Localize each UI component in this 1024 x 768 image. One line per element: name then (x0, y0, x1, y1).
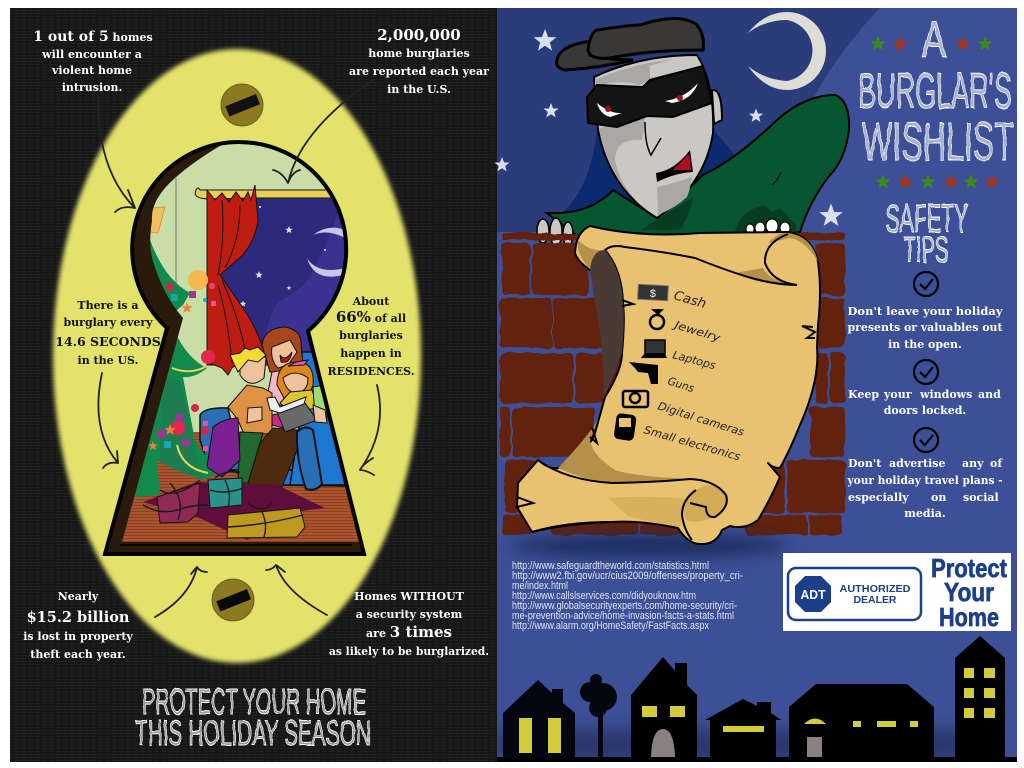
keyhole dark frame (100, 140, 370, 560)
tip 3: social (963, 491, 999, 504)
right fingers (746, 219, 790, 234)
stat: 66 percent (327, 295, 415, 378)
scroll lines (517, 234, 815, 540)
tip 3: media. (904, 507, 946, 520)
stat: 2,000,000 burglaries (349, 26, 489, 96)
stat: 3 times: as likely to be burglarized. (329, 645, 489, 658)
heading: safety tips (886, 197, 968, 270)
stat: 2,000,000 burglaries: 2,000,000 (377, 26, 461, 44)
boy (207, 347, 272, 483)
keyhole family scene (100, 140, 370, 560)
wishlist: jewelry (650, 309, 722, 345)
mask (587, 66, 712, 127)
grey smudge (590, 250, 624, 400)
tip 1: Don't leave your holiday (848, 305, 1003, 318)
stat: 3 times: are 3 times (366, 623, 452, 641)
stat: 14.6 seconds: in the US. (78, 354, 138, 367)
tip 1 (848, 305, 1003, 351)
tip 3: on (931, 491, 946, 504)
stat: 15.2 billion (23, 590, 133, 661)
authorized dealer: AUTHORIZED (840, 584, 910, 595)
tree (580, 674, 617, 758)
wishlist: cash: $ (650, 288, 656, 300)
authorized dealer (840, 584, 910, 606)
window night sky (207, 197, 357, 365)
stat: 3 times (329, 590, 489, 658)
tip 2: doors locked. (884, 404, 966, 417)
tip 2: Keep (848, 388, 879, 401)
stat: 66 percent: 66% of all (336, 308, 406, 326)
parchment scroll (517, 226, 820, 544)
gift: gold (227, 503, 305, 538)
hat (557, 18, 703, 70)
icon: sky stars (494, 29, 843, 226)
stat: 66 percent: happen in (340, 347, 402, 360)
scroll shading (558, 233, 818, 483)
mother (262, 327, 303, 410)
shoes (242, 484, 273, 495)
stat: 15.2 billion: is lost in property (23, 630, 133, 643)
tip 3: of (990, 457, 1003, 470)
heading: a burglar's wishlist: A (922, 11, 946, 68)
head shadow (560, 128, 735, 215)
red curtain (207, 185, 265, 375)
source links: me-prevention-advice/home-invasion-facts-a-stats.html (512, 610, 734, 622)
ADT protect your home ad (783, 553, 1011, 632)
tip 3: advertise (889, 457, 945, 470)
stat: violent intrusion: intrusion. (62, 81, 122, 94)
stat: 15.2 billion: theft each year. (30, 648, 126, 661)
tip 3: especially (848, 491, 909, 504)
protect your home label: Protect (931, 553, 1007, 583)
stat: 14.6 seconds: burglary every (63, 316, 153, 329)
wishlist: digital cameras: Digital cameras (656, 399, 746, 439)
protect your home label: Your (944, 577, 994, 607)
icon: check 3 (914, 428, 938, 452)
stat: violent intrusion: violent home (51, 64, 132, 77)
stat: 2,000,000 burglaries: home burglaries (368, 47, 470, 60)
floor (122, 432, 359, 542)
right eye (665, 83, 698, 103)
stat: 15.2 billion: Nearly (58, 590, 99, 603)
arrow: security system (266, 565, 327, 615)
stat: 3 times: a security system (356, 608, 463, 621)
panel: burglar's wishlist (494, 8, 1017, 762)
heading: safety tips: TIPS (904, 229, 948, 270)
arrow: burglaries (273, 80, 373, 183)
icon: ADT octagon: ADT (800, 587, 826, 602)
icon: ADT octagon (795, 576, 831, 612)
authorized dealer: DEALER (854, 595, 897, 606)
source links: http://www.alarm.org/HomeSafety/FastFacts.aspx (512, 620, 709, 632)
stat: 14.6 seconds: There is a (77, 299, 139, 312)
panel: keyhole door (10, 8, 497, 762)
heading: a burglar's wishlist (858, 11, 1014, 172)
icon: holiday stars top (870, 36, 993, 50)
burglar figure (537, 18, 849, 246)
heading: protect your home: PROTECT YOUR HOME (142, 681, 366, 722)
protect your home label: Home (939, 602, 999, 632)
stat: 2,000,000 burglaries: in the U.S. (387, 83, 451, 96)
wishlist: guns (629, 362, 696, 395)
tip 2: your (883, 388, 912, 401)
keyhole outline (105, 142, 364, 554)
icon: check 1 (914, 272, 938, 296)
stat: 14.6 seconds: 14.6 SECONDS (55, 334, 161, 349)
tip 1: presents or valuables out (848, 321, 1003, 334)
tip 2: windows (919, 388, 972, 401)
stat: 2,000,000 burglaries: are reported each year (349, 65, 489, 78)
wishlist: small electronics: Small electronics (642, 423, 742, 464)
arrow: residences (360, 385, 380, 475)
source links: http://www2.fbi.gov/ucr/cius2009/offenses/property_cri- (512, 570, 743, 582)
wishlist: laptops (641, 340, 717, 372)
icon: check 2 (914, 360, 938, 384)
wishlist: small electronics (613, 413, 742, 464)
tip 1: in the open. (888, 338, 962, 351)
curtain pelmet (195, 188, 350, 199)
stat: violent intrusion (33, 29, 153, 94)
stat: 3 times: Homes WITHOUT (354, 590, 465, 603)
source links: http://www.globalsecurityexperts.com/home-security/cri- (512, 600, 737, 612)
source links: http://www.safeguardtheworld.com/statistics.html (512, 560, 709, 572)
tip 3: any (962, 457, 984, 470)
wishlist: cash (638, 284, 708, 312)
green body (547, 95, 849, 236)
protect your home label (931, 553, 1007, 632)
stat: violent intrusion: will encounter a (41, 48, 142, 61)
arrow: intrusion (98, 95, 135, 212)
wishlist: jewelry: Jewelry (671, 318, 722, 345)
rug (143, 482, 325, 540)
skyline shadow (497, 730, 967, 760)
wishlist: laptops: Laptops (671, 348, 717, 372)
neighbourhood skyline (497, 636, 1017, 762)
tip 3 (847, 457, 1003, 520)
nose (645, 122, 661, 155)
lower roll (684, 485, 727, 522)
left eye (597, 103, 622, 117)
icon: bottom screw (212, 579, 254, 621)
stat: 66 percent: burglaries (339, 329, 403, 342)
wishlist: digital cameras (623, 391, 746, 439)
christmas tree (135, 206, 216, 497)
house 4 (789, 684, 934, 758)
left fingers (537, 218, 573, 246)
icon: holiday stars bottom (875, 174, 1000, 188)
stat: 66 percent: About (352, 295, 390, 308)
girl with book (267, 360, 327, 432)
arrow: every 14.6 seconds (98, 373, 118, 468)
tip 2 (848, 388, 1001, 417)
legs (248, 428, 297, 492)
stat: 15.2 billion: $15.2 billion (27, 609, 130, 626)
mouth (656, 150, 693, 182)
tip 3: your holiday travel plans - (847, 474, 1002, 487)
source links (512, 560, 743, 632)
ear (712, 90, 722, 124)
tip 3: Don't (848, 457, 882, 470)
brick wall (500, 233, 845, 535)
icon: top screw (221, 84, 263, 126)
stat: violent intrusion: 1 out of 5 homes (33, 29, 153, 45)
wishlist: guns: Guns (666, 374, 696, 395)
house 1 (503, 680, 575, 758)
heading: protect your home (135, 681, 371, 753)
source links: http://www.callslservices.com/didyouknow.htm (512, 590, 696, 602)
yellow spotlight oval (53, 49, 421, 663)
heading: protect your home: THIS HOLIDAY SEASON (135, 714, 371, 753)
icon: crescent moon (748, 12, 826, 90)
gift: teal (208, 472, 243, 508)
source links: me/index.html (512, 580, 568, 592)
house 3 (705, 699, 781, 758)
face (594, 55, 713, 218)
tip 2: and (978, 388, 1001, 401)
sofa (200, 352, 352, 486)
gift: pink (143, 480, 208, 523)
stat: 66 percent: RESIDENCES. (327, 365, 415, 378)
house 5 (955, 636, 1005, 758)
house 2 (631, 657, 697, 758)
wishlist: cash: Cash (672, 288, 708, 312)
blue knee (297, 427, 322, 490)
scroll shadow (510, 535, 790, 557)
stat: 14.6 seconds (55, 299, 161, 367)
arrow: property theft (155, 567, 207, 617)
